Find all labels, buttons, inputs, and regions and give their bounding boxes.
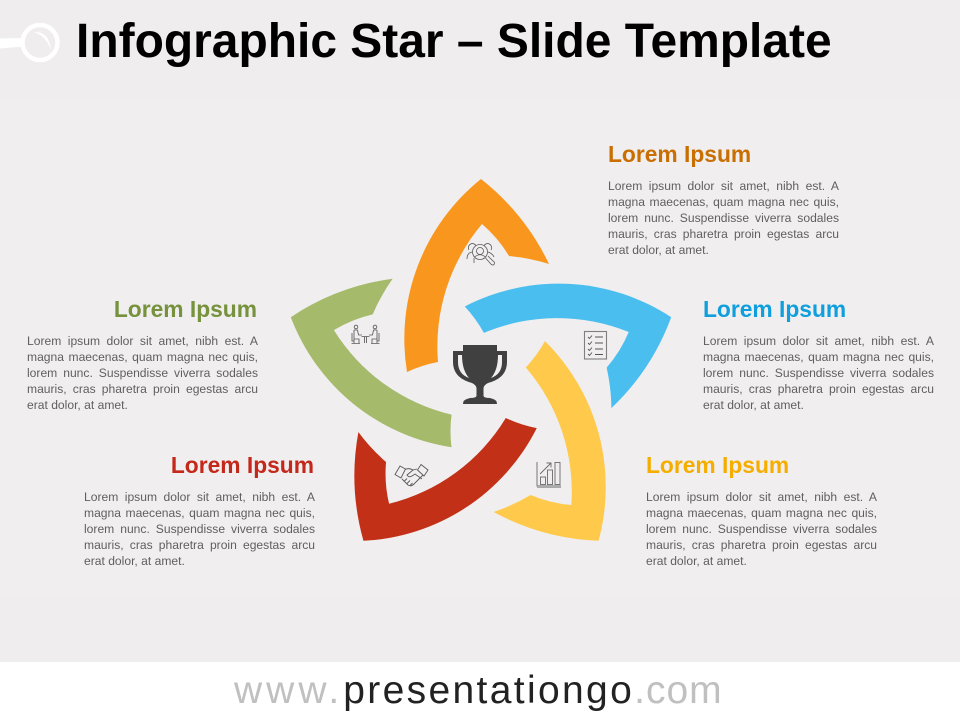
- body text: red: magna maecenas, quam magna nec quis,: [84, 506, 315, 520]
- body text: orange: mauris, cras pharetra proin egestas arcu: [608, 227, 839, 241]
- heading: orange: Lorem Ipsum: [608, 141, 751, 167]
- body text: blue: mauris, cras pharetra proin egestas arcu: [703, 382, 934, 396]
- body text: red: Lorem ipsum dolor sit amet, nibh est. A: [84, 490, 315, 504]
- body text: blue: erat dolor, at amet.: [703, 398, 804, 412]
- body text: red: mauris, cras pharetra proin egestas arcu: [84, 538, 315, 552]
- body text: red: [84, 490, 315, 568]
- body text: blue: magna maecenas, quam magna nec quis,: [703, 350, 934, 364]
- body text: yellow: [646, 490, 877, 568]
- segment: red: [308, 345, 539, 586]
- segment: blue: [464, 244, 692, 442]
- heading: yellow: Lorem Ipsum: [646, 452, 789, 478]
- body text: orange: erat dolor, at amet.: [608, 243, 709, 257]
- footer url: www.presentationgo.com: [234, 669, 723, 712]
- heading: green: Lorem Ipsum: [114, 296, 257, 322]
- icon: handshake: [395, 464, 428, 486]
- body text: green: Lorem ipsum dolor sit amet, nibh est. A: [27, 334, 258, 348]
- body text: yellow: erat dolor, at amet.: [646, 554, 747, 568]
- body text: yellow: magna maecenas, quam magna nec quis,: [646, 506, 877, 520]
- body text: green: [27, 334, 258, 412]
- body text: yellow: lorem nunc. Suspendisse viverra sodales: [646, 522, 877, 536]
- body text: orange: Lorem ipsum dolor sit amet, nibh est. A: [608, 179, 839, 193]
- body text: blue: [703, 334, 934, 412]
- icon: checklist: [584, 332, 606, 359]
- segment: yellow: [430, 340, 661, 581]
- body text: red: lorem nunc. Suspendisse viverra sodales: [84, 522, 315, 536]
- body text: green: erat dolor, at amet.: [27, 398, 128, 412]
- icon: meeting at table: [352, 325, 380, 344]
- icon: bar chart with arrow: [537, 462, 561, 488]
- segment: green: [267, 253, 495, 450]
- segment: orange: [404, 179, 549, 372]
- body text: red: erat dolor, at amet.: [84, 554, 185, 568]
- body text: blue: Lorem ipsum dolor sit amet, nibh est. A: [703, 334, 934, 348]
- panel: lower left text, red heading: [84, 452, 315, 568]
- body text: blue: lorem nunc. Suspendisse viverra sodales: [703, 366, 934, 380]
- panel: right text, blue heading: [703, 296, 934, 412]
- body text: green: lorem nunc. Suspendisse viverra sodales: [27, 366, 258, 380]
- icon: people with magnifier: [467, 244, 495, 265]
- body text: green: magna maecenas, quam magna nec quis,: [27, 350, 258, 364]
- heading: red: Lorem Ipsum: [171, 452, 314, 478]
- body text: yellow: Lorem ipsum dolor sit amet, nibh est. A: [646, 490, 877, 504]
- title: Infographic Star – Slide Template: [76, 15, 832, 68]
- body text: yellow: mauris, cras pharetra proin egestas arcu: [646, 538, 877, 552]
- panel: top right text, orange heading: [608, 141, 839, 257]
- body text: orange: lorem nunc. Suspendisse viverra sodales: [608, 211, 839, 225]
- body text: orange: [608, 179, 839, 257]
- panel: left text, green heading: [27, 296, 258, 412]
- heading: blue: Lorem Ipsum: [703, 296, 846, 322]
- icon: trophy: [453, 345, 507, 404]
- panel: lower right text, yellow heading: [646, 452, 877, 568]
- body text: orange: magna maecenas, quam magna nec quis,: [608, 195, 839, 209]
- logo: white ring pin: [0, 23, 60, 62]
- body text: green: mauris, cras pharetra proin egestas arcu: [27, 382, 258, 396]
